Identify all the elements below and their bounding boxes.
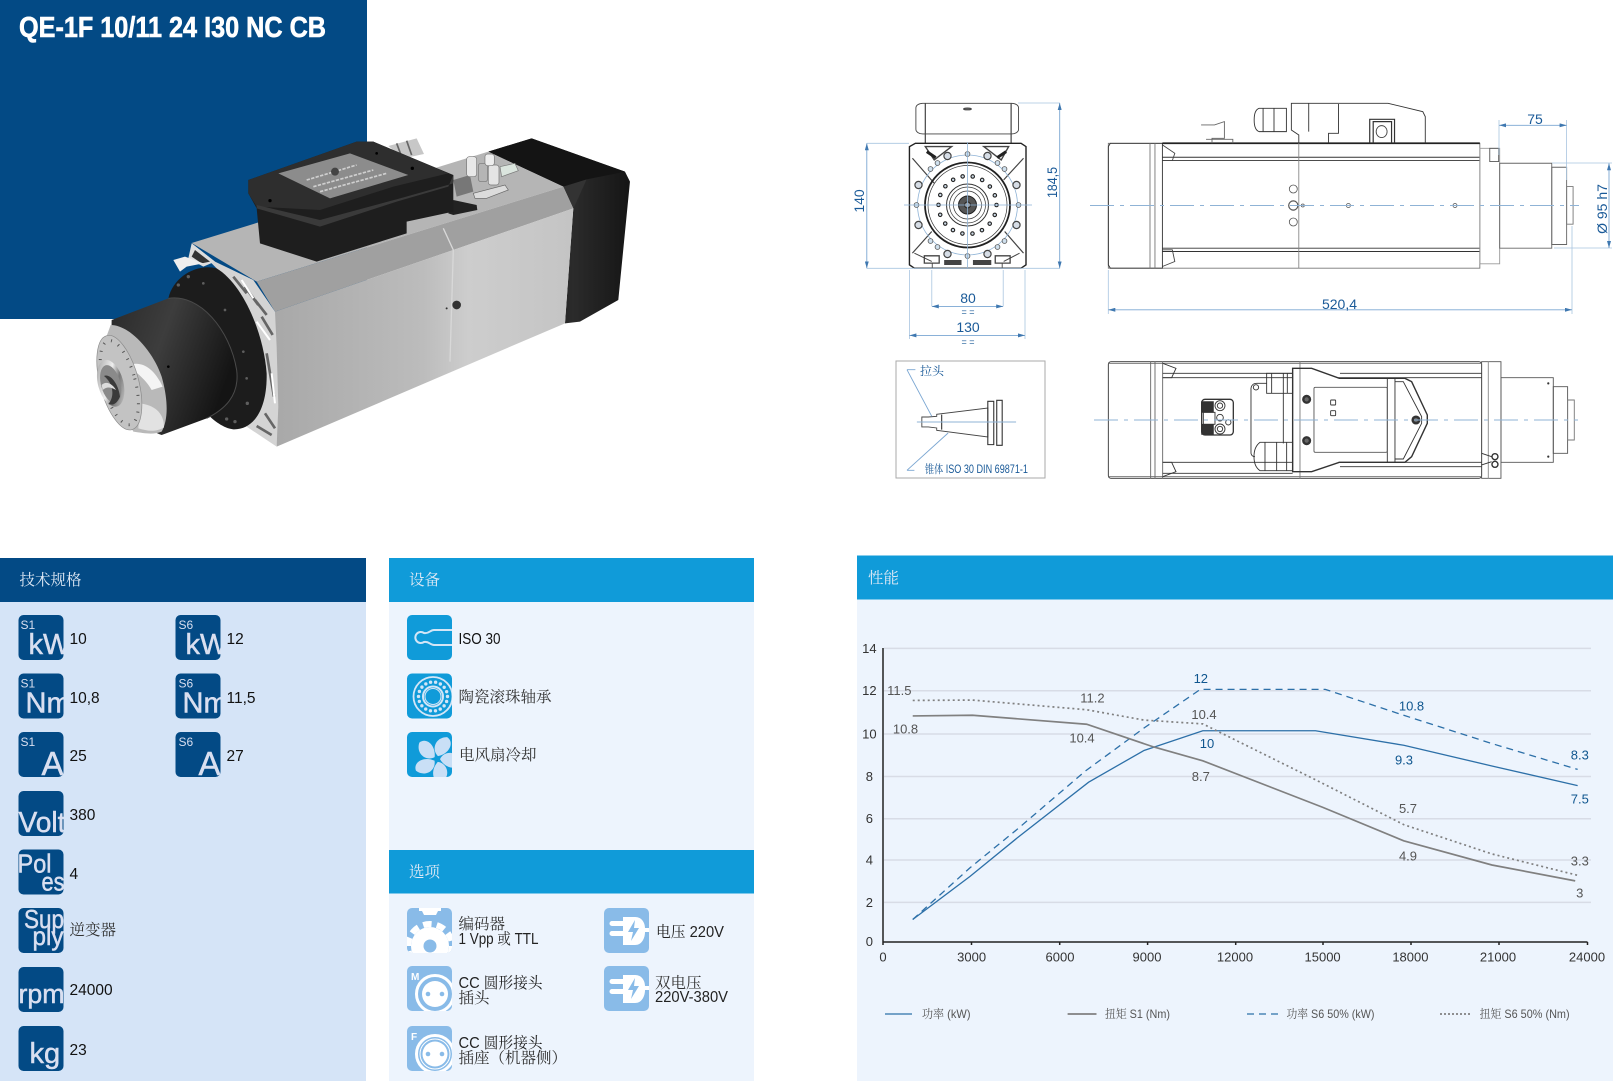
spec: S6 A: [176, 732, 243, 777]
y axis labels: 2: [866, 895, 873, 910]
heading: 设备: [409, 571, 441, 589]
y axis labels: 10: [862, 726, 877, 742]
spec: S1 Nm: [18, 674, 100, 720]
option: 220V: 电压 220V: [656, 923, 725, 941]
spec: S1 kW: kW: [28, 629, 71, 661]
spec: S6 A: A: [198, 745, 221, 782]
value labels: 4.9: [1399, 848, 1417, 864]
technical drawings: [867, 103, 1612, 478]
x axis labels: 12000: [1217, 950, 1253, 964]
line chart: [862, 641, 1605, 1021]
dimension labels: Ø 95 h7: [1594, 184, 1610, 234]
spec: supply: ply: [32, 921, 64, 951]
spec: S1 kW: 10: [70, 631, 87, 648]
spec: S1 Nm: 10,8: [70, 690, 100, 707]
dimension labels: [851, 111, 1610, 347]
value labels: 5.7: [1399, 801, 1417, 816]
tool drawing: [907, 370, 1016, 470]
spec: S1 A: 25: [70, 748, 87, 765]
value labels: 3.3: [1571, 854, 1589, 868]
y axis labels: 4: [866, 852, 873, 868]
x axis labels: 24000: [1569, 950, 1605, 964]
value labels: 11.2: [1080, 690, 1105, 706]
callout: taper: 锥体 ISO 30 DIN 69871-1: [925, 462, 1028, 476]
spec: S1 Nm: Nm: [26, 688, 71, 720]
option: CC round plug: [407, 966, 543, 1012]
legend: 功率 (kW): [922, 1006, 971, 1021]
panel: performance: [857, 556, 1613, 1081]
x axis labels: 18000: [1392, 950, 1428, 964]
drawing: top view: [1108, 362, 1574, 478]
spec: S1 Nm: S1: [20, 676, 36, 690]
heading: 性能: [868, 569, 899, 587]
spec: poles: 4: [70, 866, 78, 883]
option: encoder: 编码器: [458, 915, 506, 933]
drawing: front view: [904, 103, 1032, 268]
dimension lines: [867, 103, 1612, 339]
heading: 选项: [409, 863, 441, 881]
option: dual voltage: 双电压: [655, 974, 702, 992]
option: encoder: 1 Vpp 或 TTL: [458, 930, 539, 948]
spec: S1 A: [18, 732, 86, 777]
title: QE-1F 10/11 24 I30 NC CB: [19, 12, 326, 44]
dimension labels: 184,5: [1044, 167, 1060, 198]
spec: S6 kW: kW: [186, 629, 228, 661]
x axis labels: [879, 950, 1605, 964]
option: encoder: [407, 908, 538, 953]
option: dual voltage: [604, 966, 729, 1011]
option: CC round socket: CC 圆形接头: [458, 1034, 543, 1052]
x axis labels: 3000: [957, 950, 986, 964]
spec: S6 kW: [176, 615, 244, 661]
value labels: 9.3: [1395, 752, 1413, 768]
torque S1: [913, 715, 1575, 881]
spec: supply: 逆变器: [70, 921, 117, 939]
spec: S1 kW: [18, 615, 87, 661]
legend: [885, 1006, 1570, 1021]
series: [913, 689, 1579, 920]
option: CC round plug: 插头: [458, 988, 490, 1007]
y axis labels: 14: [862, 641, 877, 656]
x axis labels: 21000: [1480, 950, 1516, 964]
panel: equipment: [389, 558, 754, 850]
spec: voltage: Volt: [18, 807, 66, 839]
center lines: [1090, 206, 1579, 420]
x axis labels: 6000: [1046, 950, 1074, 964]
spec: S6 Nm: S6: [178, 676, 194, 690]
option: dual voltage: 220V-380V: [655, 989, 729, 1006]
flange bolts: [915, 152, 1020, 258]
option: CC round plug: CC 圆形接头: [458, 974, 543, 992]
spec: supply: Sup: [24, 904, 64, 934]
grid lines: [884, 648, 1591, 902]
equipment: ISO 30: ISO 30: [458, 631, 501, 648]
x axis labels: 15000: [1305, 950, 1341, 964]
option: CC round plug: M: [411, 972, 419, 983]
dimension labels: = =: [961, 337, 975, 347]
value labels: 8.7: [1192, 769, 1210, 784]
dimension labels: 75: [1527, 111, 1543, 127]
junction box and fittings: [248, 138, 518, 262]
motor front: fins, flange, nose: [88, 243, 278, 447]
motor body and rear cap: [192, 138, 630, 447]
dimension labels: 520,4: [1322, 296, 1357, 312]
value labels: [887, 671, 1589, 900]
torque S6: [913, 700, 1579, 876]
spec: poles: Pol: [18, 848, 52, 878]
y axis labels: 0: [866, 934, 873, 949]
spec: speed: 24000: [70, 982, 113, 999]
option: CC round socket: 插座（机器侧）: [458, 1048, 567, 1067]
spec: S6 Nm: [176, 674, 256, 720]
option: CC round socket: F: [411, 1032, 417, 1043]
spec: supply: [18, 904, 117, 953]
panel: technical specifications: [0, 558, 366, 1081]
value labels: 10.4: [1191, 707, 1217, 722]
spec: S6 A: 27: [226, 748, 244, 765]
value labels: 3: [1576, 886, 1583, 900]
spec: voltage: [18, 791, 96, 839]
spec: S6 Nm: 11,5: [226, 690, 256, 707]
spec: weight: 23: [70, 1042, 87, 1059]
value labels: 10.8: [1399, 698, 1424, 714]
value labels: 11.5: [887, 683, 911, 698]
equipment: ISO 30: [407, 615, 501, 660]
y axis labels: 6: [866, 811, 873, 826]
x axis labels: 9000: [1133, 950, 1161, 964]
equipment: ceramic bearing: [407, 674, 552, 718]
callout: pull stud: 拉头: [920, 363, 945, 378]
spec: S6 A: S6: [178, 735, 194, 749]
option: 220V: [604, 908, 725, 953]
spec: S1 A: S1: [20, 735, 36, 749]
value labels: 8.3: [1571, 748, 1589, 762]
spec: weight: kg: [30, 1038, 60, 1070]
spec: poles: [18, 848, 78, 896]
power S6: [913, 689, 1578, 920]
spec: S6 kW: 12: [226, 631, 244, 648]
motor spindle photo illustration: [88, 138, 630, 447]
dimension labels: 140: [851, 189, 867, 213]
inset: tool taper: [896, 361, 1045, 478]
equipment: electric fan cooling: [407, 732, 536, 777]
value labels: 10.4: [1069, 730, 1095, 746]
value labels: 10.8: [893, 722, 918, 736]
y axis labels: 12: [862, 683, 877, 698]
spec: S1 kW: S1: [20, 618, 36, 632]
legend: 扭矩 S6 50% (Nm): [1480, 1006, 1570, 1021]
spec: S6 kW: S6: [178, 618, 194, 632]
drawing: side view: [1108, 103, 1573, 268]
y axis labels: [862, 641, 877, 949]
spec: speed: rpm: [18, 979, 64, 1009]
spec: S6 Nm: Nm: [182, 688, 228, 720]
value labels: 7.5: [1571, 792, 1589, 806]
heading: 技术规格: [20, 571, 82, 589]
y axis labels: 8: [866, 769, 873, 784]
spec: weight: [18, 1026, 87, 1071]
axes: [883, 648, 1588, 945]
dimension labels: 80: [960, 290, 976, 306]
spec: poles: es: [42, 866, 64, 896]
dimension labels: 130: [956, 319, 980, 335]
equipment: ceramic bearing: 陶瓷滚珠轴承: [458, 688, 552, 706]
spec: voltage: 380: [70, 807, 96, 824]
spec: speed: [18, 967, 113, 1012]
dimension labels: = =: [961, 307, 975, 317]
spec: S1 A: A: [42, 745, 64, 782]
legend: 扭矩 S1 (Nm): [1105, 1006, 1170, 1021]
power S1: [913, 731, 1578, 920]
value labels: 12: [1194, 671, 1208, 686]
title block: [0, 0, 367, 319]
option: CC round socket: [407, 1026, 567, 1072]
value labels: 10: [1200, 736, 1214, 751]
panel: options: [389, 850, 754, 1081]
legend: 功率 S6 50% (kW): [1286, 1006, 1374, 1021]
x axis labels: 0: [879, 950, 887, 964]
equipment: electric fan cooling: 电风扇冷却: [459, 746, 537, 764]
